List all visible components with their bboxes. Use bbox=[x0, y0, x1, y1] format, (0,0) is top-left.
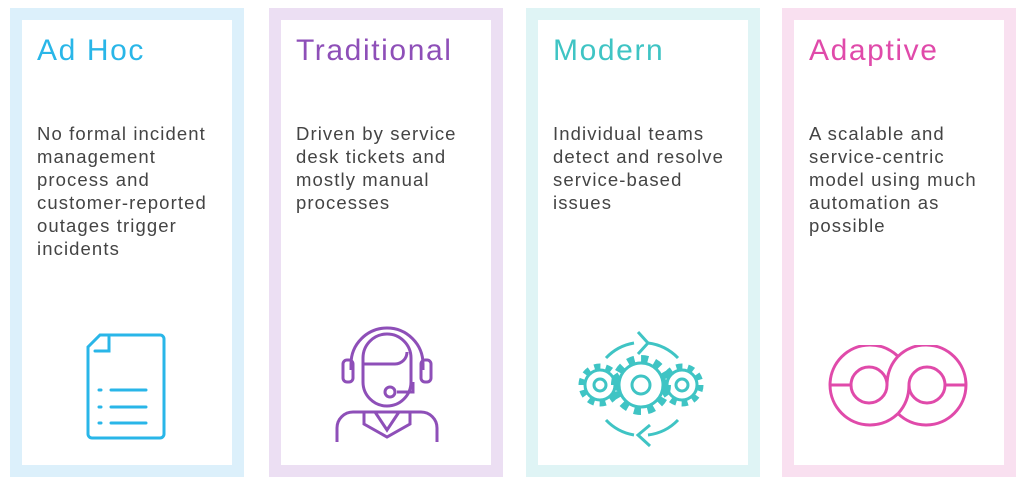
text: Adaptive description: possible bbox=[809, 215, 886, 236]
panel: Traditional bbox=[269, 8, 503, 477]
text: Modern description: detect and resolve bbox=[553, 146, 724, 167]
text: Ad Hoc description: process and bbox=[37, 169, 150, 190]
text: Adaptive description: model using much bbox=[809, 169, 977, 190]
text: Modern description bbox=[553, 123, 724, 213]
heading: Adaptive: Adaptive bbox=[809, 34, 939, 67]
text: Ad Hoc description: customer-reported bbox=[37, 192, 207, 213]
text: Traditional description: Driven by service bbox=[296, 123, 457, 144]
icon: gears cycle bbox=[578, 331, 704, 448]
heading: Traditional: Traditional bbox=[296, 34, 453, 67]
text: Ad Hoc description: No formal incident bbox=[37, 123, 206, 144]
heading: Ad Hoc: Ad Hoc bbox=[37, 34, 145, 67]
text: Traditional description bbox=[296, 123, 457, 213]
heading: Modern: Modern bbox=[553, 34, 664, 67]
icon: document bbox=[86, 334, 166, 440]
text: Modern description: issues bbox=[553, 192, 612, 213]
text: Ad Hoc description bbox=[37, 123, 207, 259]
panel: Modern bbox=[526, 8, 760, 477]
icon: infinity loop bbox=[828, 345, 968, 426]
text: Ad Hoc description: management bbox=[37, 146, 156, 167]
icon: headset agent bbox=[336, 326, 438, 442]
text: Modern description: Individual teams bbox=[553, 123, 704, 144]
panel: Ad Hoc bbox=[10, 8, 244, 477]
text: Ad Hoc description: outages trigger bbox=[37, 215, 177, 236]
text: Adaptive description: automation as bbox=[809, 192, 940, 213]
text: Adaptive description: service-centric bbox=[809, 146, 945, 167]
text: Traditional description: mostly manual bbox=[296, 169, 430, 190]
text: Ad Hoc description: incidents bbox=[37, 238, 120, 259]
text: Adaptive description bbox=[809, 123, 977, 236]
text: Traditional description: processes bbox=[296, 192, 390, 213]
panel: Adaptive bbox=[782, 8, 1016, 477]
text: Modern description: service-based bbox=[553, 169, 682, 190]
text: Adaptive description: A scalable and bbox=[809, 123, 945, 144]
text: Traditional description: desk tickets and bbox=[296, 146, 446, 167]
